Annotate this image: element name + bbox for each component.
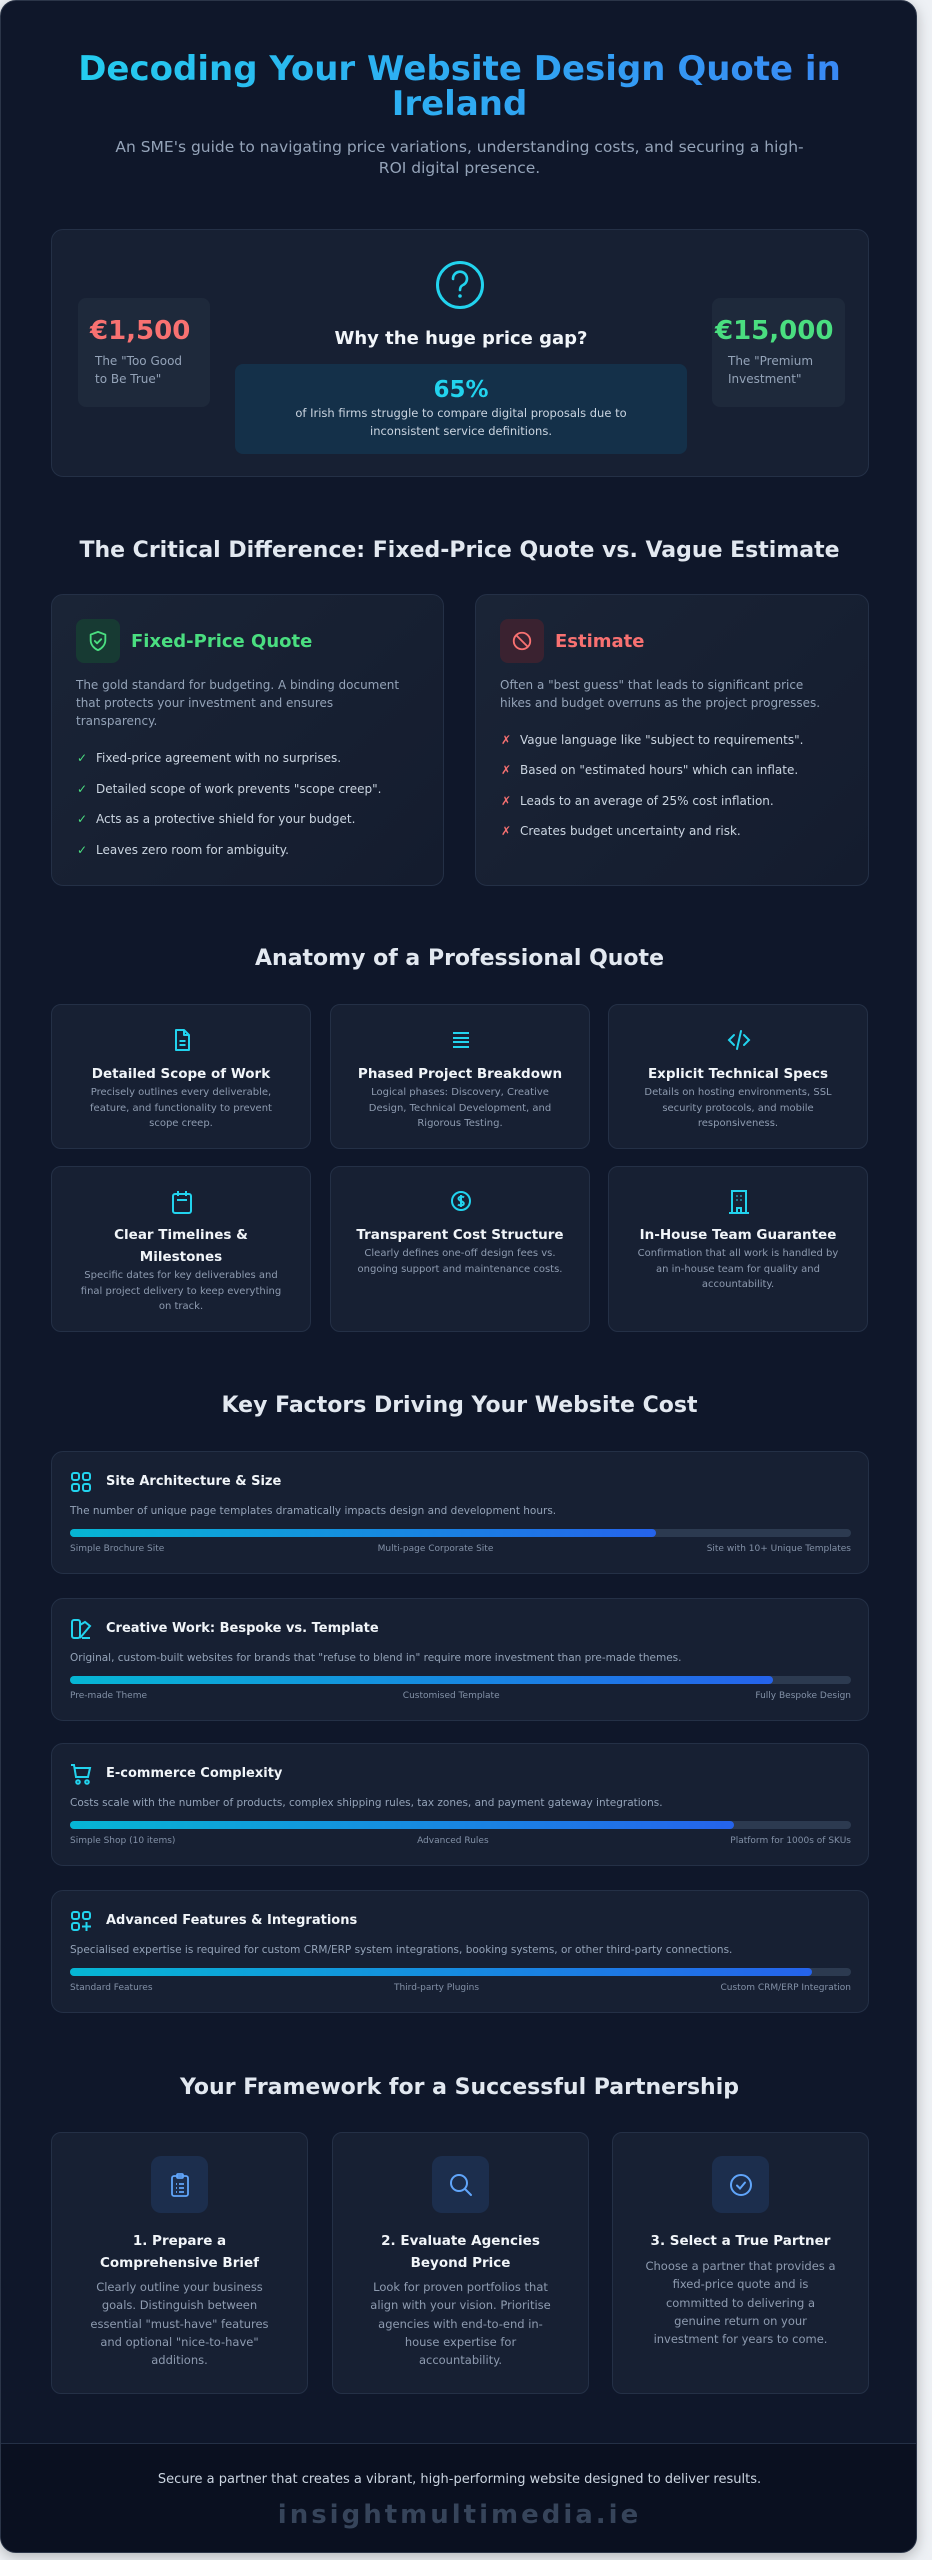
card: detailed scope: scope creep. — [149, 1118, 213, 1129]
description — [500, 678, 820, 710]
card: cost structure: ongoing support and maintenance costs. — [358, 1264, 562, 1274]
factor: site architecture: The number of unique page templates dramatically impacts design and development hours. — [70, 1505, 556, 1517]
list: Acts as a protective shield for your budget. — [96, 812, 355, 826]
card: timelines — [51, 1166, 311, 1332]
icon: question mark — [436, 261, 484, 309]
step 2: align with your vision. Prioritise — [370, 2298, 551, 2312]
price box: low: The "Too Good — [95, 354, 182, 368]
step 2 — [332, 2132, 589, 2394]
price box: low — [78, 298, 210, 407]
list: ✓ — [77, 782, 87, 796]
factor: ecommerce: Simple Shop (10 items) — [70, 1836, 175, 1846]
stat box: inconsistent service definitions. — [370, 424, 552, 438]
factor: advanced features: Third-party Plugins — [394, 1983, 479, 1993]
card: detailed scope: Precisely outlines every deliverable, — [91, 1087, 271, 1098]
stat box: 65% — [433, 377, 489, 403]
price box: low: €1,500 — [90, 316, 190, 346]
factor: creative work: Customised Template — [403, 1691, 500, 1701]
icon: building — [729, 1190, 749, 1214]
price box: high — [712, 298, 845, 407]
icon: search — [432, 2156, 489, 2213]
card: in-house team — [608, 1166, 868, 1332]
factor: advanced features: Advanced Features & Integrations — [106, 1913, 357, 1928]
description: Often a "best guess" that leads to significant price — [500, 678, 803, 692]
step 1: 1. Prepare a — [133, 2233, 226, 2249]
card: timelines: on track. — [159, 1301, 203, 1312]
title: Decoding Your Website Design Quote in — [78, 49, 841, 89]
step 3: fixed-price quote and is — [673, 2277, 808, 2291]
card: detailed scope: feature, and functionality to prevent — [90, 1102, 272, 1114]
step 1: essential "must-have" features — [90, 2317, 269, 2331]
step 3: 3. Select a True Partner — [651, 2233, 830, 2249]
step 1: Comprehensive Brief — [100, 2255, 259, 2271]
subtitle — [115, 138, 804, 177]
factor: advanced features: Standard Features — [70, 1983, 153, 1993]
icon: check circle — [712, 2156, 769, 2213]
stat box — [235, 364, 687, 454]
card: phased breakdown: Logical phases: Discovery, Creative — [371, 1087, 549, 1098]
card: technical specs: responsiveness. — [698, 1118, 778, 1129]
factor: advanced features: Specialised expertise is required for custom CRM/ERP system integrations, booking systems, or other third-party connections. — [70, 1944, 732, 1956]
brand: insightmultimedia.ie — [278, 2500, 641, 2530]
icon: dollar — [451, 1191, 471, 1211]
list: ✗ — [501, 824, 511, 838]
icon: list — [453, 1032, 469, 1048]
list: ✗ — [501, 733, 511, 747]
card: in-house team: an in-house team for quality and — [656, 1264, 820, 1274]
card: in-house team: In-House Team Guarantee — [640, 1227, 836, 1243]
heading: framework: Your Framework for a Successful Partnership — [180, 2075, 739, 2100]
title — [1, 52, 918, 122]
step 2: accountability. — [419, 2353, 502, 2367]
bar — [70, 1968, 851, 1976]
step 3 — [612, 2132, 869, 2394]
list: ✓ — [77, 843, 87, 857]
card: technical specs: Details on hosting environments, SSL — [644, 1087, 832, 1098]
icon: shield — [76, 619, 120, 663]
question heading: Why the huge price gap? — [334, 328, 587, 349]
card: phased breakdown: Design, Technical Development, and — [369, 1102, 551, 1114]
list: ✓ — [77, 751, 87, 765]
subtitle: ROI digital presence. — [379, 159, 540, 177]
description — [76, 678, 399, 728]
factor: creative work: Fully Bespoke Design — [755, 1691, 851, 1701]
card: technical specs: Explicit Technical Specs — [648, 1066, 828, 1082]
stat box: of Irish firms struggle to compare digital proposals due to — [295, 406, 627, 420]
list: Based on "estimated hours" which can inflate. — [520, 763, 798, 777]
factor: ecommerce: Platform for 1000s of SKUs — [730, 1836, 851, 1846]
factor: creative work: Creative Work: Bespoke vs. Template — [106, 1621, 379, 1636]
price box: low: to Be True" — [95, 372, 161, 386]
footer text: Secure a partner that creates a vibrant, high-performing website designed to deliver results. — [158, 2472, 761, 2487]
title: Estimate — [555, 631, 644, 652]
subtitle: An SME's guide to navigating price variations, understanding costs, and securing a high- — [115, 138, 804, 156]
bar — [70, 1821, 851, 1829]
card: in-house team: accountability. — [702, 1279, 774, 1290]
description: transparency. — [76, 714, 157, 728]
factor: advanced features: Custom CRM/ERP Integration — [720, 1983, 851, 1993]
description: The gold standard for budgeting. A binding document — [76, 678, 399, 692]
card: timelines: Clear Timelines & — [114, 1227, 248, 1243]
card: phased breakdown — [330, 1004, 590, 1149]
title: Ireland — [392, 84, 527, 124]
factor: site architecture: Simple Brochure Site — [70, 1544, 164, 1554]
icon: clipboard — [151, 2156, 208, 2213]
step 2: Look for proven portfolios that — [373, 2280, 548, 2294]
icon: grid plus — [71, 1911, 91, 1931]
card: phased breakdown: Rigorous Testing. — [417, 1118, 503, 1129]
price box: high: €15,000 — [715, 316, 833, 346]
step 2: Beyond Price — [411, 2255, 510, 2271]
card: detailed scope — [51, 1004, 311, 1149]
step 1: additions. — [151, 2353, 208, 2367]
step 3: committed to delivering a — [666, 2296, 815, 2310]
factor: ecommerce: Costs scale with the number of products, complex shipping rules, tax zones, and payment gateway integrations. — [70, 1797, 663, 1809]
icon: document — [175, 1029, 190, 1051]
list: ✗ — [501, 763, 511, 777]
heading: key factors: Key Factors Driving Your Website Cost — [222, 1393, 698, 1418]
icon: grid — [71, 1472, 91, 1492]
heading: critical difference: The Critical Difference: Fixed-Price Quote vs. Vague Estimate — [79, 538, 840, 563]
icon: prohibited — [500, 619, 544, 663]
card: timelines: final project delivery to keep everything — [81, 1286, 281, 1296]
card: timelines: Milestones — [140, 1249, 222, 1265]
list: Vague language like "subject to requirements". — [520, 733, 803, 747]
card: phased breakdown: Phased Project Breakdown — [358, 1066, 562, 1082]
list — [77, 751, 381, 857]
factor: ecommerce — [51, 1743, 869, 1866]
factor: creative work: Original, custom-built websites for brands that "refuse to blend in" require more investment than pre-made themes. — [70, 1652, 682, 1664]
heading: anatomy: Anatomy of a Professional Quote — [255, 946, 664, 971]
card: technical specs: security protocols, and mobile — [662, 1102, 814, 1114]
card: cost structure — [330, 1166, 590, 1332]
step 3: investment for years to come. — [654, 2332, 827, 2346]
card: technical specs — [608, 1004, 868, 1149]
icon: palette — [71, 1619, 92, 1639]
step 1: goals. Distinguish between — [102, 2298, 257, 2312]
card: cost structure: Transparent Cost Structure — [356, 1227, 564, 1243]
step 1: Clearly outline your business — [96, 2280, 263, 2294]
list: Detailed scope of work prevents "scope creep". — [96, 782, 381, 796]
panel: fixed-price quote — [51, 594, 444, 886]
factor: ecommerce: E-commerce Complexity — [106, 1766, 282, 1781]
step 2: house expertise for — [405, 2335, 516, 2349]
factor: site architecture — [51, 1451, 869, 1574]
card: detailed scope: Detailed Scope of Work — [92, 1066, 270, 1082]
step 3: Choose a partner that provides a — [645, 2259, 836, 2273]
description: hikes and budget overruns as the project progresses. — [500, 696, 820, 710]
description: that protects your investment and ensures — [76, 696, 333, 710]
bar — [70, 1676, 851, 1684]
price box: high: Investment" — [728, 372, 802, 386]
bar — [70, 1529, 851, 1537]
step 1: and optional "nice-to-have" — [100, 2335, 259, 2349]
factor: site architecture: Site Architecture & Size — [106, 1474, 281, 1489]
factor: creative work — [51, 1598, 869, 1721]
card: timelines: Specific dates for key deliverables and — [84, 1270, 278, 1281]
list: Fixed-price agreement with no surprises. — [96, 751, 341, 765]
card: cost structure: Clearly defines one-off design fees vs. — [364, 1248, 556, 1259]
step 2: 2. Evaluate Agencies — [381, 2233, 540, 2249]
panel: price gap hero — [51, 229, 869, 477]
icon: code — [728, 1030, 750, 1050]
footer — [1, 2443, 918, 2554]
step 2: agencies with end-to-end in- — [378, 2317, 543, 2331]
list: Leaves zero room for ambiguity. — [96, 843, 289, 857]
list: ✓ — [77, 812, 87, 826]
factor: ecommerce: Advanced Rules — [417, 1836, 489, 1846]
icon: calendar — [172, 1191, 192, 1214]
step 1 — [51, 2132, 308, 2394]
step 3: genuine return on your — [674, 2314, 807, 2328]
icon: cart — [71, 1764, 92, 1785]
list: ✗ — [501, 794, 511, 808]
card: in-house team: Confirmation that all work is handled by — [638, 1248, 838, 1259]
factor: creative work: Pre-made Theme — [70, 1691, 147, 1701]
panel: estimate — [475, 594, 869, 886]
factor: site architecture: Multi-page Corporate Site — [378, 1544, 493, 1554]
list: Creates budget uncertainty and risk. — [520, 824, 741, 838]
title: Fixed-Price Quote — [131, 631, 312, 652]
list: Leads to an average of 25% cost inflation. — [520, 794, 774, 808]
factor: site architecture: Site with 10+ Unique Templates — [707, 1544, 851, 1554]
list — [501, 733, 803, 838]
price box: high: The "Premium — [728, 354, 813, 368]
factor: advanced features — [51, 1890, 869, 2013]
